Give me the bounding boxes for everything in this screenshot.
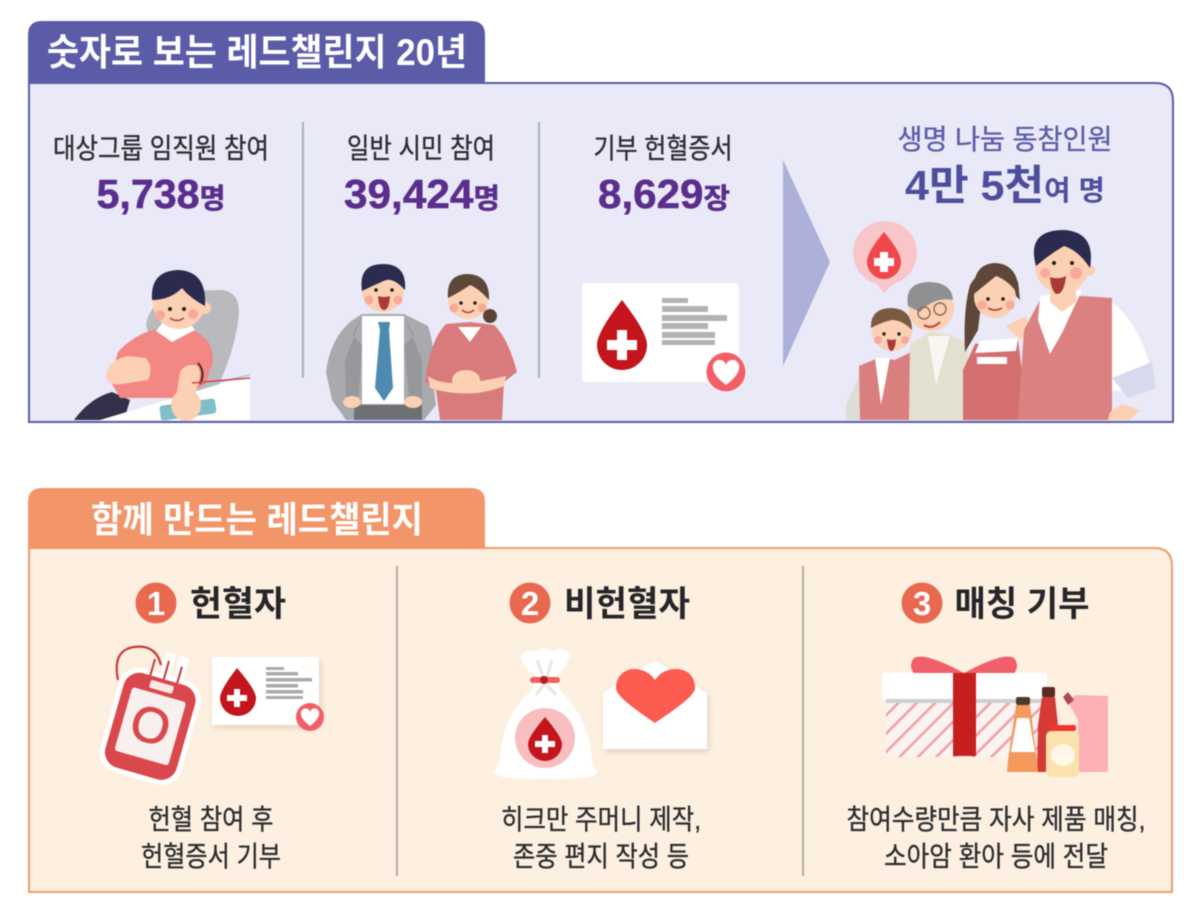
man [1018, 230, 1156, 420]
panel: making the red challenge together [28, 488, 1172, 892]
icon: speech bubble with blood drop [853, 221, 917, 293]
arrow [783, 160, 830, 366]
stat: total participants: 생명 나눔 동참인원 [898, 124, 1112, 155]
stat: employees [53, 133, 269, 217]
heading tab [28, 21, 485, 83]
column heading: 2 [521, 585, 539, 622]
description [501, 804, 701, 872]
panel body [29, 548, 1172, 892]
heading tab [28, 488, 485, 549]
illustration: blood donor [74, 270, 250, 421]
stat: citizens [344, 133, 500, 217]
panel body [29, 83, 1173, 422]
description: 헌혈 참여 후 [148, 804, 274, 835]
description: 소아암 환아 등에 전달 [884, 841, 1108, 872]
icon: certificate with heart [212, 657, 324, 731]
stat: citizens: 일반 시민 참여 [347, 133, 495, 164]
description: 존중 편지 작성 등 [513, 841, 689, 872]
description: 헌혈증서 기부 [141, 841, 281, 872]
column heading [509, 582, 690, 624]
stat: employees: 대상그룹 임직원 참여 [53, 133, 269, 164]
grandfather [907, 282, 968, 420]
icon: envelope with heart [603, 660, 707, 749]
description [141, 804, 281, 872]
description: 히크만 주머니 제작, [501, 804, 701, 835]
stat: citizens: 39,424명 [344, 171, 500, 217]
column heading: 매칭 기부 [954, 585, 1090, 624]
stat: total participants: 4만 5천여 명 [905, 162, 1105, 209]
illustration: family group [846, 230, 1156, 420]
column: matching donation [846, 582, 1146, 872]
column heading: 3 [913, 585, 931, 622]
column: non-donors [494, 582, 707, 872]
stat: total participants [898, 124, 1112, 209]
column heading [901, 582, 1090, 624]
illustration: man and woman [326, 264, 517, 420]
stat: certificates [594, 133, 732, 217]
icon: blood bag: O [124, 693, 177, 758]
stat: certificates: 8,629장 [598, 171, 730, 217]
column: blood donors [95, 582, 324, 872]
description: 참여수량만큼 자사 제품 매칭, [846, 804, 1146, 835]
heading tab: 함께 만드는 레드챌린지 [91, 499, 423, 540]
description [846, 804, 1146, 872]
column heading: 헌혈자 [190, 585, 286, 624]
stat: certificates: 기부 헌혈증서 [594, 133, 732, 164]
icon: food products [1007, 687, 1108, 777]
boy [846, 308, 912, 420]
column heading: 1 [147, 585, 165, 622]
heading tab: 숫자로 보는 레드챌린지 20년 [47, 32, 467, 73]
icon: donation certificate [582, 283, 746, 392]
panel: 20 years in numbers [28, 21, 1173, 422]
icon: blood bag [95, 642, 212, 790]
icon: gift box [882, 657, 1047, 757]
column heading [135, 582, 286, 624]
column heading: 비헌혈자 [564, 585, 690, 624]
stat: employees: 5,738명 [96, 171, 226, 217]
woman [963, 263, 1030, 420]
icon: hickman pouch [494, 648, 597, 779]
